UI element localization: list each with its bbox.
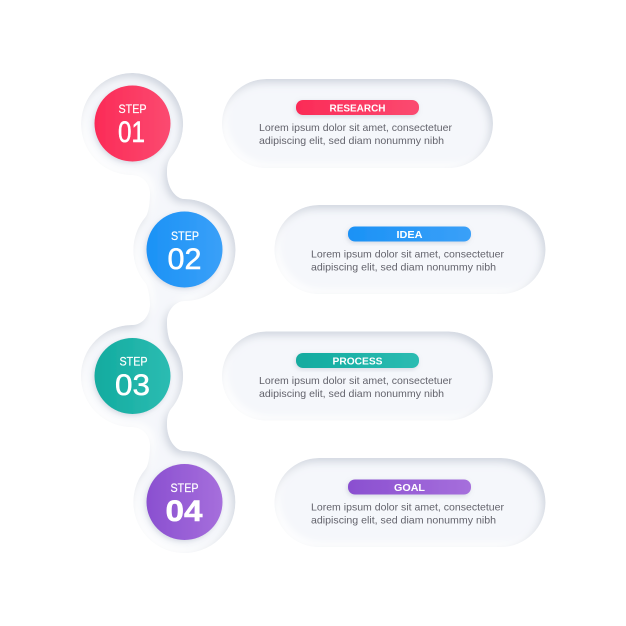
panel: step 02 idea <box>274 205 546 294</box>
tag: goal: GOAL <box>394 482 426 494</box>
description text: Lorem ipsum dolor sit amet, consectetuer <box>311 502 504 514</box>
tag: process: PROCESS <box>332 356 382 368</box>
pill background <box>274 458 546 547</box>
badge: step 04: STEP <box>170 481 198 495</box>
timeline connector track <box>81 73 236 553</box>
panel: step 03 process <box>222 332 493 420</box>
badge: step 02: 02 <box>168 243 202 276</box>
badge: step 03: STEP <box>120 354 148 368</box>
description text: Lorem ipsum dolor sit amet, consectetuer <box>259 122 452 134</box>
description text <box>311 248 504 274</box>
badge: step 03 <box>94 338 170 414</box>
description text: adipiscing elit, sed diam nonummy nibh <box>311 514 496 526</box>
description text: adipiscing elit, sed diam nonummy nibh <box>259 135 444 147</box>
tag: idea <box>348 226 471 242</box>
pill background <box>222 79 493 168</box>
description text: Lorem ipsum dolor sit amet, consectetuer <box>259 375 452 387</box>
description text: adipiscing elit, sed diam nonummy nibh <box>259 388 444 400</box>
description text: Lorem ipsum dolor sit amet, consectetuer <box>311 248 504 260</box>
badge: step 01: 01 <box>118 116 145 149</box>
badge: step 01 <box>94 86 170 162</box>
badge: step 02: STEP <box>171 229 199 243</box>
panel: step 04 goal <box>274 458 546 547</box>
badge: step 04 <box>146 464 222 540</box>
description text <box>259 122 452 147</box>
pill background <box>222 332 493 420</box>
badge: step 04: 04 <box>166 495 203 528</box>
tag: research <box>296 100 419 115</box>
tag: idea: IDEA <box>396 229 423 241</box>
description text: adipiscing elit, sed diam nonummy nibh <box>311 262 496 274</box>
tag: goal <box>348 480 471 494</box>
pill background <box>274 205 546 294</box>
panel: step 01 research <box>222 79 493 168</box>
badge: step 03: 03 <box>115 369 150 402</box>
badge: step 01: STEP <box>118 102 146 116</box>
description text <box>259 375 452 400</box>
tag: process <box>296 353 419 368</box>
badge: step 02 <box>146 212 222 288</box>
description text <box>311 502 504 526</box>
tag: research: RESEARCH <box>330 102 386 114</box>
